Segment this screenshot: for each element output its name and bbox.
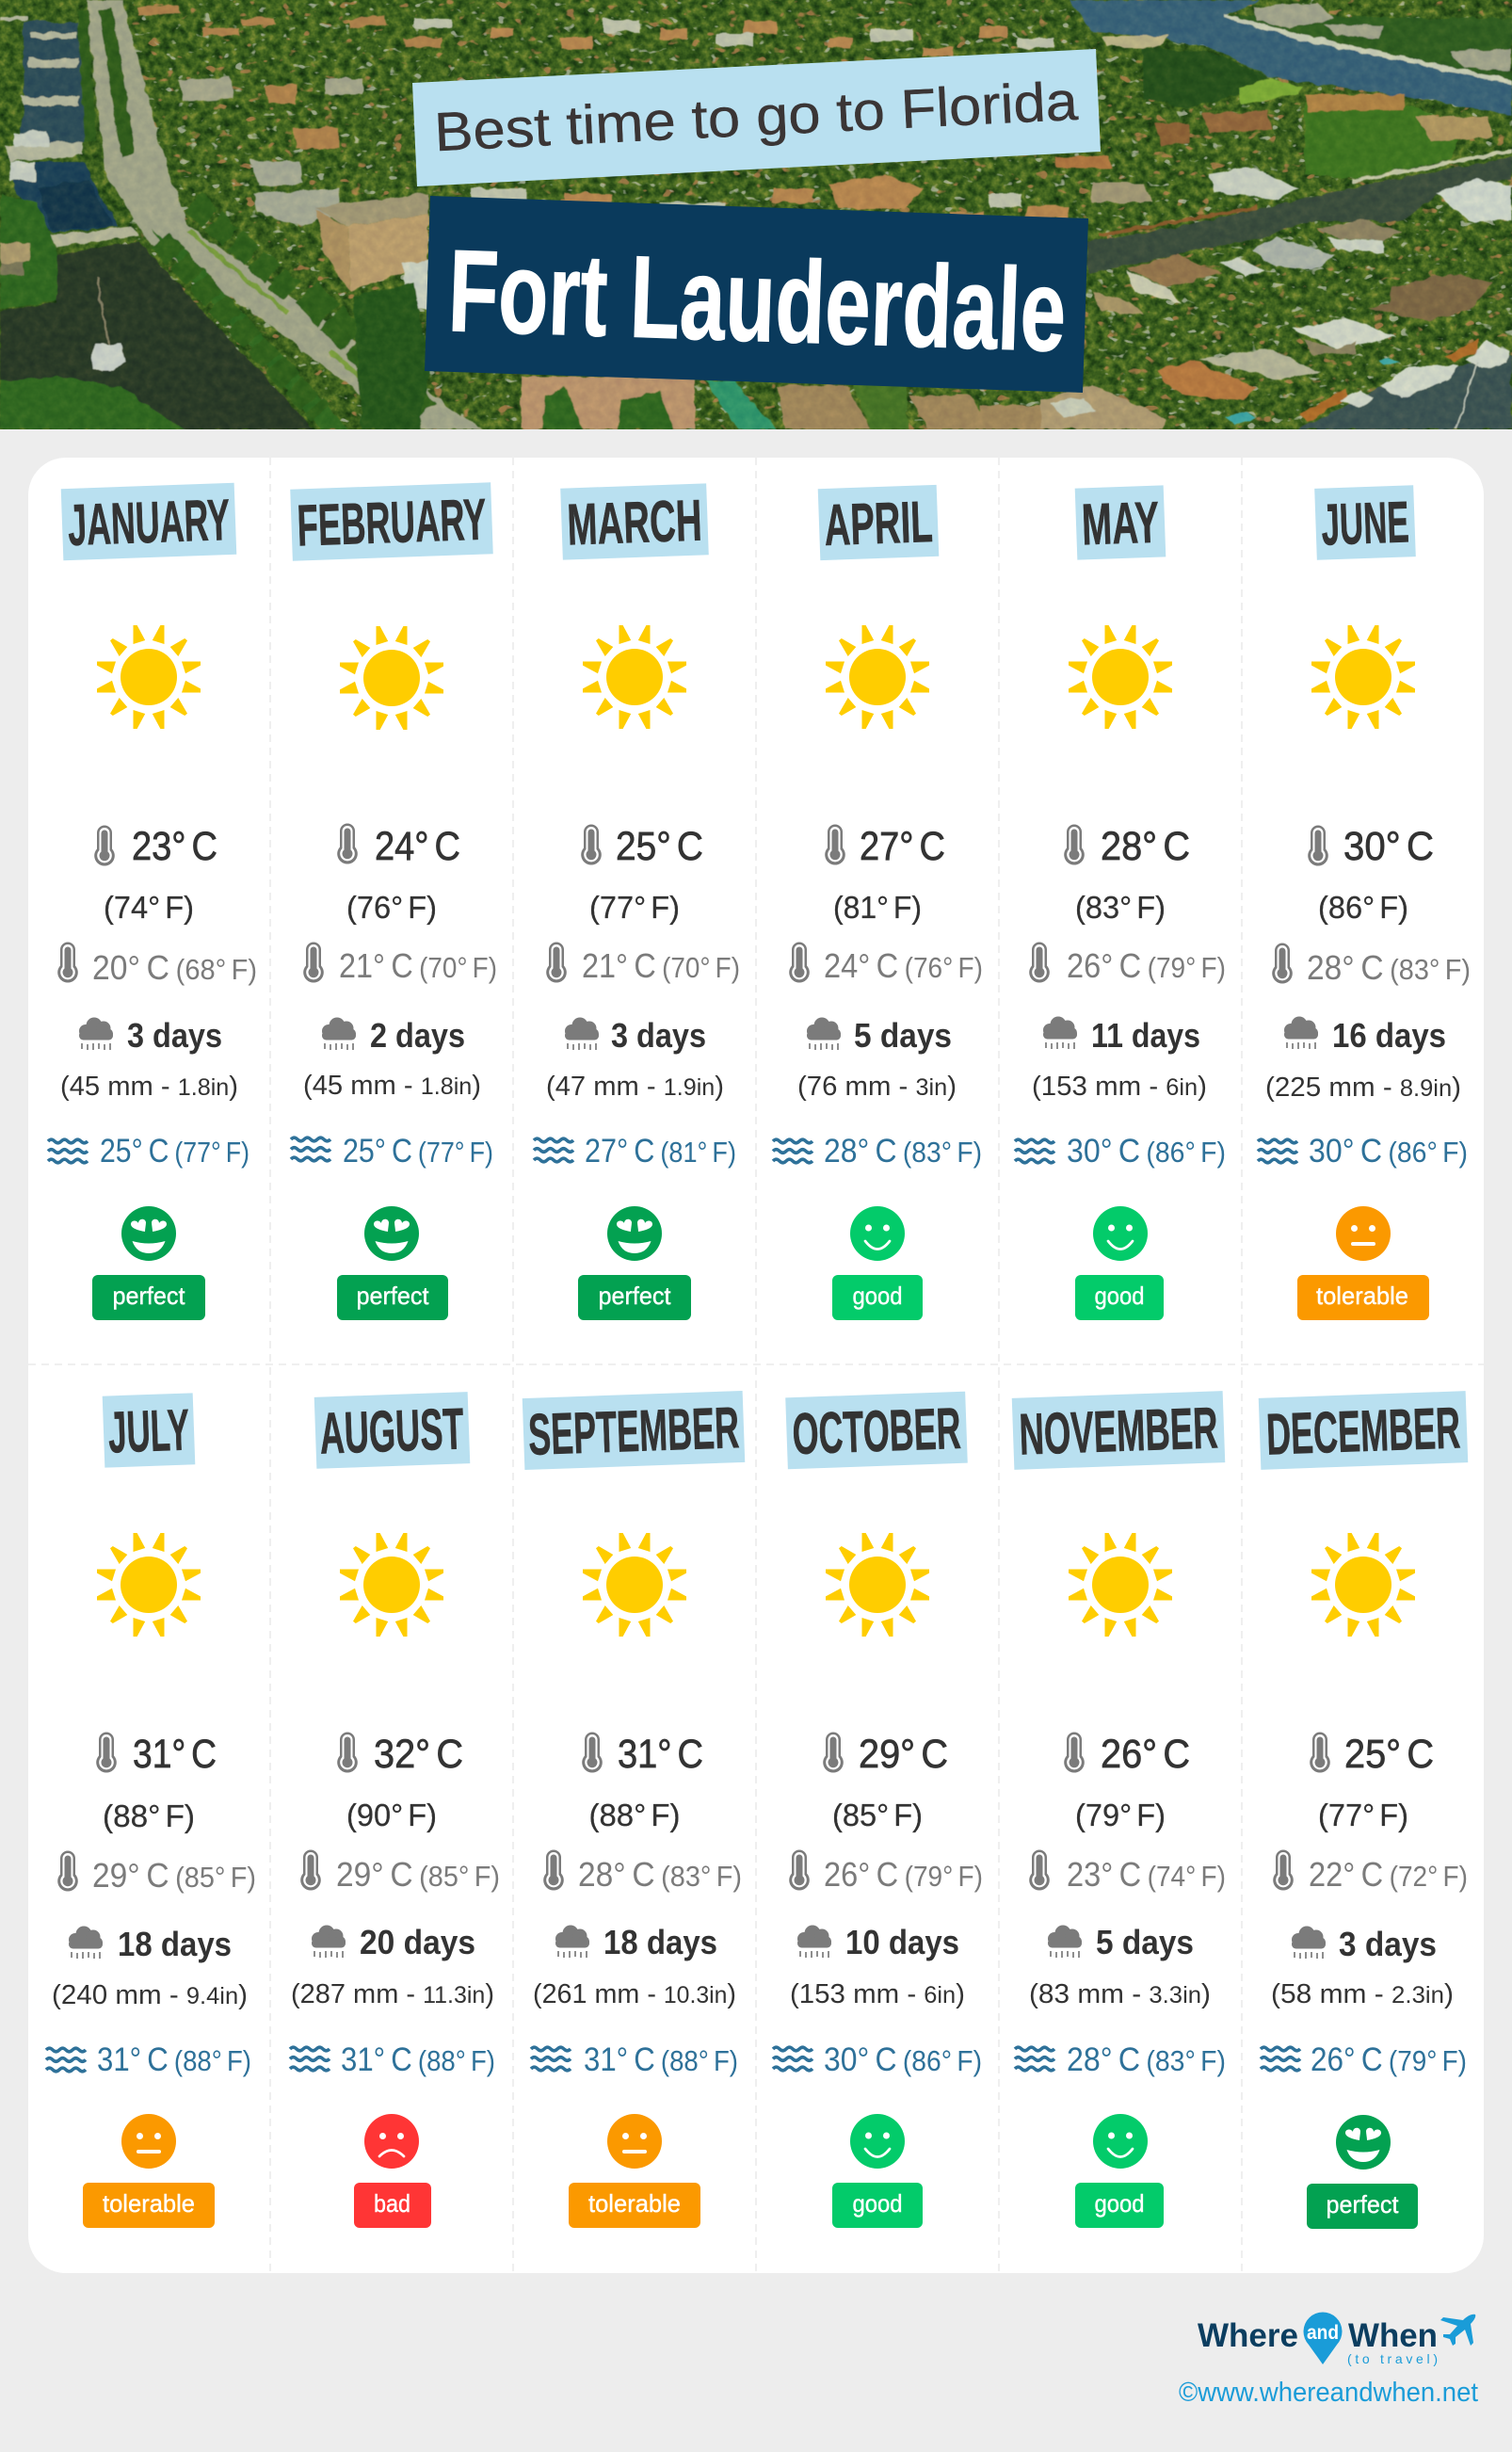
icon: thermometer low <box>303 942 324 983</box>
subtitle banner <box>412 49 1101 186</box>
icon: waves <box>290 2047 330 2071</box>
icon: sun <box>826 1533 929 1637</box>
month label <box>61 483 236 560</box>
low temperature: 21° C (70° F) <box>582 946 740 985</box>
icon: waves <box>1258 1139 1297 1163</box>
icon: rain cloud <box>79 1017 113 1050</box>
sea temperature: 30° C (86° F) <box>1309 1133 1468 1170</box>
rainy days: 2 days <box>370 1016 465 1055</box>
high temperature: 28° C <box>1101 824 1190 869</box>
rating badge: bad <box>374 2189 410 2218</box>
rating badge: tolerable <box>1316 1282 1408 1310</box>
rainy days: 5 days <box>854 1016 952 1055</box>
month label: APRIL <box>823 490 934 558</box>
website url: ©www.whereandwhen.net <box>1179 2378 1478 2408</box>
icon: thermometer low <box>1029 1849 1050 1891</box>
low temperature: 23° C (74° F) <box>1067 1855 1226 1894</box>
icon: waves <box>291 1137 330 1161</box>
icon: waves <box>46 2048 86 2072</box>
rainfall: (58 mm - 2.3in) <box>1271 1979 1454 2009</box>
rating badge <box>92 1275 205 1320</box>
icon: sun <box>1069 625 1172 729</box>
low temperature: 28° C (83° F) <box>1307 948 1471 987</box>
logo: Where and When: When <box>1348 2317 1438 2354</box>
rating badge <box>83 2183 215 2228</box>
rating badge <box>832 2183 923 2228</box>
month label <box>523 1391 745 1470</box>
month label <box>560 483 709 560</box>
month label <box>1314 485 1416 560</box>
icon: thermometer low <box>57 942 78 983</box>
logo: Where and When <box>1198 2313 1475 2366</box>
month label <box>1012 1391 1225 1470</box>
low temperature: 29° C (85° F) <box>336 1855 500 1894</box>
rating badge: good <box>853 1282 902 1310</box>
month label: MARCH <box>566 489 703 557</box>
high temperature fahrenheit: (79° F) <box>1075 1798 1166 1832</box>
rainy days: 16 days <box>1332 1016 1446 1055</box>
icon: good face <box>1093 1206 1148 1261</box>
high temperature: 24° C <box>375 824 460 869</box>
icon: sun <box>1311 625 1415 729</box>
rainy days: 18 days <box>118 1925 232 1963</box>
month label <box>103 1393 195 1468</box>
sea temperature: 26° C (79° F) <box>1311 2041 1467 2078</box>
icon: sun <box>1311 1533 1415 1637</box>
rating badge <box>1307 2184 1418 2229</box>
icon: tolerable face <box>121 2114 176 2169</box>
sea temperature: 30° C (86° F) <box>1067 1133 1226 1170</box>
icon: waves <box>48 1139 88 1163</box>
sea temperature: 30° C (86° F) <box>824 2041 982 2078</box>
icon: airplane <box>1440 2315 1475 2346</box>
icon: sun <box>340 1533 443 1637</box>
icon: thermometer low <box>57 1851 78 1892</box>
icon: thermometer low <box>543 1849 564 1891</box>
panel: October <box>773 1392 983 2228</box>
rainy days: 18 days <box>603 1923 717 1961</box>
high temperature: 25° C <box>1344 1732 1434 1777</box>
icon: rain cloud <box>565 1017 599 1050</box>
rating badge: perfect <box>113 1282 185 1310</box>
rainfall: (45 mm - 1.8in) <box>60 1072 238 1102</box>
high temperature: 29° C <box>859 1732 948 1777</box>
icon: thermometer high <box>581 825 602 865</box>
high temperature fahrenheit: (88° F) <box>589 1798 680 1832</box>
icon: rain cloud <box>555 1925 589 1958</box>
high temperature: 27° C <box>860 824 945 869</box>
rating badge: good <box>853 2189 902 2218</box>
icon: waves <box>1015 2047 1054 2071</box>
panel: calendar card <box>28 458 1484 2273</box>
panel: May <box>1015 485 1226 1320</box>
rating badge: tolerable <box>588 2189 681 2218</box>
low temperature: 26° C (79° F) <box>824 1855 983 1894</box>
icon: perfect face <box>121 1206 176 1261</box>
rainy days: 3 days <box>127 1016 222 1055</box>
month label: JUNE <box>1320 490 1410 558</box>
low temperature: 22° C (72° F) <box>1309 1855 1468 1894</box>
icon: waves <box>531 2047 571 2071</box>
high temperature fahrenheit: (86° F) <box>1318 890 1408 925</box>
icon: thermometer high <box>337 1733 358 1773</box>
title banner <box>425 196 1088 393</box>
icon: good face <box>1093 2114 1148 2169</box>
rainfall: (240 mm - 9.4in) <box>52 1980 248 2010</box>
icon: thermometer high <box>94 825 115 866</box>
high temperature: 31° C <box>133 1732 217 1777</box>
icon: map pin <box>1304 2313 1343 2364</box>
sea temperature: 31° C (88° F) <box>584 2041 738 2078</box>
icon: rain cloud <box>1048 1925 1082 1958</box>
icon: thermometer low <box>789 942 810 983</box>
icon: sun <box>583 625 686 729</box>
rainfall: (76 mm - 3in) <box>797 1072 957 1102</box>
high temperature: 31° C <box>618 1732 703 1777</box>
low temperature: 21° C (70° F) <box>339 946 497 985</box>
rainfall: (83 mm - 3.3in) <box>1029 1979 1211 2009</box>
low temperature: 26° C (79° F) <box>1067 946 1226 985</box>
icon: tolerable face <box>607 2114 662 2169</box>
high temperature: 26° C <box>1101 1732 1190 1777</box>
rainy days: 10 days <box>845 1923 959 1961</box>
icon: thermometer high <box>825 825 845 865</box>
rainfall: (47 mm - 1.9in) <box>546 1072 724 1102</box>
low temperature: 20° C (68° F) <box>92 948 257 987</box>
low temperature: 24° C (76° F) <box>824 946 983 985</box>
icon: thermometer high <box>582 1733 603 1773</box>
icon: waves <box>1015 1139 1054 1163</box>
icon: good face <box>850 2114 905 2169</box>
icon: sun <box>1069 1533 1172 1637</box>
icon: sun <box>340 626 443 730</box>
icon: rain cloud <box>1043 1017 1077 1049</box>
rainy days: 20 days <box>360 1923 475 1961</box>
rating badge <box>1075 2183 1164 2228</box>
icon: map pin: and <box>1307 2322 1339 2344</box>
logo: Where and When: Where <box>1198 2317 1298 2354</box>
high temperature: 25° C <box>616 824 703 869</box>
icon: rain cloud <box>69 1927 103 1959</box>
icon: thermometer low <box>300 1849 321 1891</box>
rating badge: perfect <box>1326 2190 1399 2218</box>
panel: July <box>46 1393 256 2228</box>
month label: AUGUST <box>318 1396 465 1467</box>
icon: sun <box>583 1533 686 1637</box>
icon: thermometer low <box>1272 944 1293 984</box>
icon: rain cloud <box>797 1925 831 1958</box>
high temperature fahrenheit: (81° F) <box>833 890 922 925</box>
month label: SEPTEMBER <box>527 1395 740 1468</box>
month label <box>290 482 493 561</box>
rainy days: 3 days <box>611 1016 706 1055</box>
high temperature: 30° C <box>1343 824 1434 869</box>
panel: August <box>290 1392 500 2228</box>
rating badge <box>1297 1275 1429 1320</box>
panel: December <box>1259 1391 1468 2229</box>
icon: thermometer high <box>96 1733 117 1773</box>
low temperature: 28° C (83° F) <box>578 1855 742 1894</box>
rating badge: good <box>1094 1282 1145 1310</box>
high temperature fahrenheit: (88° F) <box>103 1799 195 1833</box>
logo: Where and When: (to travel) <box>1347 2351 1438 2366</box>
high temperature fahrenheit: (74° F) <box>104 890 194 925</box>
icon: waves <box>534 1138 573 1162</box>
icon: rain cloud <box>1284 1017 1318 1049</box>
sea temperature: 28° C (83° F) <box>1067 2041 1226 2078</box>
rating badge: perfect <box>356 1282 429 1310</box>
month label: FEBRUARY <box>296 488 488 558</box>
sea temperature: 25° C (77° F) <box>343 1133 493 1170</box>
panel: February <box>290 482 497 1320</box>
icon: thermometer low <box>546 942 567 983</box>
high temperature fahrenheit: (90° F) <box>346 1798 437 1832</box>
rating badge <box>1075 1275 1164 1320</box>
icon: thermometer high <box>337 823 358 864</box>
icon: thermometer low <box>1273 1849 1294 1891</box>
rainfall: (225 mm - 8.9in) <box>1265 1073 1461 1103</box>
high temperature: 23° C <box>132 824 217 869</box>
rating badge <box>354 2183 431 2228</box>
rainy days: 5 days <box>1096 1923 1194 1961</box>
high temperature fahrenheit: (83° F) <box>1075 890 1166 925</box>
month label: JULY <box>107 1398 190 1465</box>
rating badge <box>578 1275 691 1320</box>
month label: NOVEMBER <box>1018 1395 1219 1468</box>
panel: January <box>48 483 257 1320</box>
panel: November <box>1012 1391 1226 2228</box>
icon: thermometer low <box>1029 942 1050 983</box>
icon: perfect face <box>607 1206 662 1261</box>
high temperature fahrenheit: (77° F) <box>1318 1798 1408 1832</box>
title banner: Fort Lauderdale <box>446 226 1068 377</box>
icon: perfect face <box>1336 2115 1391 2170</box>
icon: thermometer high <box>1308 825 1328 866</box>
rating badge <box>569 2183 700 2228</box>
month label <box>1075 485 1166 560</box>
icon: rain cloud <box>1292 1927 1326 1959</box>
icon: rain cloud <box>312 1925 346 1958</box>
rating badge: perfect <box>599 1282 671 1310</box>
icon: bad face <box>364 2114 419 2169</box>
rainfall: (153 mm - 6in) <box>1032 1072 1207 1102</box>
rating badge <box>832 1275 923 1320</box>
rainfall: (287 mm - 11.3in) <box>291 1979 494 2009</box>
low temperature: 29° C (85° F) <box>92 1856 256 1895</box>
icon: thermometer high <box>823 1733 844 1773</box>
high temperature fahrenheit: (85° F) <box>832 1798 923 1832</box>
month label <box>785 1392 968 1469</box>
high temperature fahrenheit: (76° F) <box>346 890 437 925</box>
icon: tolerable face <box>1336 1206 1391 1261</box>
month label <box>314 1392 470 1469</box>
sea temperature: 28° C (83° F) <box>824 1133 982 1170</box>
icon: waves <box>773 2047 812 2071</box>
icon: sun <box>97 625 201 729</box>
rating badge <box>337 1275 448 1320</box>
rating badge: good <box>1094 2189 1145 2218</box>
rainfall: (45 mm - 1.8in) <box>303 1071 481 1101</box>
icon: sun <box>97 1533 201 1637</box>
sea temperature: 31° C (88° F) <box>97 2041 251 2078</box>
icon: thermometer low <box>789 1849 810 1891</box>
icon: sun <box>826 625 929 729</box>
sea temperature: 27° C (81° F) <box>585 1133 736 1170</box>
icon: good face <box>850 1206 905 1261</box>
month label: JANUARY <box>67 488 231 558</box>
panel: June <box>1258 485 1471 1320</box>
header aerial photo <box>0 0 1512 429</box>
high temperature fahrenheit: (77° F) <box>589 890 680 925</box>
sea temperature: 25° C (77° F) <box>100 1133 249 1170</box>
icon: thermometer high <box>1064 1733 1085 1773</box>
subtitle banner: Best time to go to Florida <box>433 71 1080 163</box>
panel: April <box>773 485 983 1320</box>
icon: rain cloud <box>807 1017 841 1050</box>
icon: perfect face <box>364 1206 419 1261</box>
icon: waves <box>773 1139 812 1163</box>
rainy days: 3 days <box>1339 1925 1437 1963</box>
icon: thermometer high <box>1064 825 1085 865</box>
month label <box>818 485 939 560</box>
panel: March <box>534 483 740 1320</box>
rainy days: 11 days <box>1091 1016 1200 1055</box>
rating badge: tolerable <box>103 2189 195 2218</box>
icon: rain cloud <box>322 1017 356 1050</box>
high temperature: 32° C <box>374 1732 463 1777</box>
rainfall: (261 mm - 10.3in) <box>533 1979 736 2009</box>
rainfall: (153 mm - 6in) <box>790 1979 965 2009</box>
month label: MAY <box>1081 491 1160 557</box>
month label: OCTOBER <box>791 1396 962 1467</box>
sea temperature: 31° C (88° F) <box>341 2041 495 2078</box>
icon: waves <box>1261 2047 1300 2071</box>
panel: September <box>523 1391 745 2228</box>
icon: thermometer high <box>1310 1733 1330 1773</box>
